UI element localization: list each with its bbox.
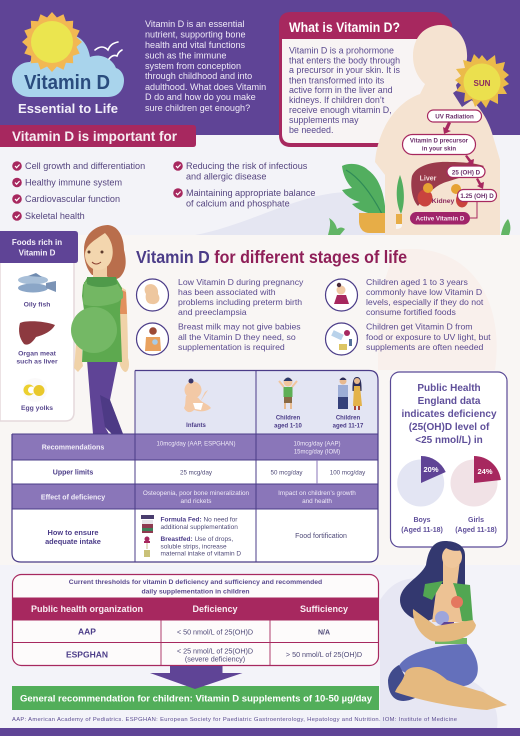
benefits list: Reducing the risk of infectious — [186, 161, 308, 171]
children 1-10 label — [274, 416, 302, 430]
egg yolks label: Egg yolks — [21, 405, 53, 412]
row: effect of deficiency: Impact on children’s growth — [278, 490, 356, 497]
icon: mother with baby — [136, 323, 168, 355]
children 1-10 label: aged 1-10 — [274, 424, 302, 430]
benefits list: Cell growth and differentiation — [25, 161, 145, 171]
benefits list: Cardiovascular function — [25, 194, 120, 204]
label: 1.25 (OH) D — [458, 190, 496, 202]
heading banner: Vitamin D is important for: Vitamin D is important for — [12, 128, 178, 144]
child silhouette — [375, 25, 500, 235]
baby — [435, 611, 449, 625]
girls label: (Aged 11-18) — [455, 527, 497, 534]
right arm — [116, 285, 129, 372]
pathway arrows — [443, 122, 484, 189]
icon: formula tin — [141, 515, 154, 533]
note: children 1 to 3 — [366, 277, 484, 317]
benefits list: Maintaining appropriate balance — [186, 188, 315, 198]
note: children 1 to 3: commonly have low Vitamin D — [366, 287, 482, 297]
row: effect of deficiency — [41, 490, 356, 505]
icon: birds — [95, 42, 122, 59]
foods heading: Vitamin D — [19, 248, 56, 258]
illustration: pregnant woman — [71, 225, 129, 434]
table: thresholds — [12, 574, 378, 666]
foods heading: Foods rich in — [12, 238, 62, 247]
row: how to ensure adequate intake — [45, 515, 347, 558]
benefits list — [12, 161, 315, 221]
neck — [93, 262, 107, 282]
intro text — [145, 19, 266, 113]
panel text: (25(OH)D level of — [409, 422, 490, 433]
plant: large leaf and pot — [328, 164, 510, 235]
table body — [12, 370, 378, 562]
panel: Public Health England data — [390, 372, 507, 547]
panel text: England data — [418, 396, 481, 407]
row: AAP: AAP — [78, 626, 96, 636]
row: effect of deficiency: Effect of deficiency — [41, 494, 105, 502]
body silhouette with vitamin D pathway — [375, 25, 509, 235]
callout: general recommendation — [12, 686, 379, 710]
row: upper limits: Upper limits — [53, 470, 93, 476]
row: recommendations: 10mcg/day (AAP) — [293, 442, 341, 448]
table caption: daily supplementation in children — [141, 588, 250, 596]
body silhouette with vitamin D pathway: Kidney — [432, 198, 455, 205]
header row — [12, 598, 378, 620]
logo word: Vitamin D — [24, 71, 110, 94]
note: breast milk — [178, 322, 301, 352]
note: breast milk: all the Vitamin D they need, so — [178, 332, 296, 342]
row: how to ensure adequate intake: maternal intake of vitamin D — [160, 550, 241, 558]
row: AAP — [78, 626, 330, 636]
benefits list: Healthy immune system — [25, 178, 122, 188]
note: UV and supplements — [366, 322, 491, 352]
panel: What is Vitamin D?: active form in the liver and — [289, 85, 393, 95]
logo tagline: Essential to Life — [18, 101, 118, 116]
label: 25 (OH) D — [447, 166, 485, 178]
row: upper limits — [53, 470, 366, 476]
row: effect of deficiency: and health — [302, 498, 332, 505]
boys label: Boys — [413, 517, 431, 524]
face and neck — [443, 560, 460, 585]
chart: boys 20% — [397, 456, 446, 506]
illustration: breastfeeding woman — [380, 541, 507, 728]
row: how to ensure adequate intake: Formula Fed: No need for — [160, 516, 238, 524]
intro text: nutrient, supporting bone — [145, 30, 246, 40]
organ meat label: Organ meat — [18, 350, 57, 358]
note: children 1 to 3: consume fortified foods — [366, 307, 456, 317]
panel: What is Vitamin D? — [279, 12, 460, 147]
icon: sun — [22, 12, 82, 72]
icon: dropper — [144, 536, 150, 557]
panel: What is Vitamin D?: What is Vitamin D? — [289, 20, 400, 35]
panel text — [401, 383, 497, 446]
table caption — [69, 579, 322, 596]
girls label — [455, 517, 497, 534]
organ meat label: such as liver — [16, 358, 58, 366]
body silhouette with vitamin D pathway: Liver — [420, 176, 437, 182]
plant in arm gap — [396, 175, 404, 229]
sun illustration: SUN — [474, 79, 491, 88]
intro text: D do and how do you make — [145, 92, 256, 102]
note: children 1 to 3: Children aged 1 to 3 years — [366, 277, 469, 287]
hair — [84, 225, 126, 279]
arms — [413, 609, 476, 642]
row: how to ensure adequate intake: Breastfed: Use of drops, — [160, 536, 233, 543]
stage notes with icons — [136, 277, 491, 355]
footer band — [0, 728, 520, 736]
row: ESPGHAN: > 50 nmol/L of 25(OH)D — [286, 650, 362, 659]
row: upper limits: 100 mcg/day — [330, 470, 366, 476]
heading banner: Vitamin D is important for — [0, 125, 196, 147]
intro text: system from conception — [145, 61, 241, 71]
face — [85, 233, 113, 270]
icon: organ meat — [19, 321, 55, 345]
row: upper limits: 50 mcg/day — [270, 470, 303, 476]
boys label: (Aged 11-18) — [401, 527, 443, 534]
chart: girls 24% — [450, 456, 501, 506]
note: children 1 to 3: levels, especially if they do not — [366, 297, 484, 307]
panel: What is Vitamin D?: then transformed into its — [289, 76, 385, 86]
note: pregnancy: problems including preterm birth — [178, 297, 302, 307]
hair — [400, 541, 465, 622]
note: pregnancy — [178, 277, 304, 317]
row: how to ensure adequate intake: adequate intake — [45, 537, 101, 546]
row: recommendations — [42, 442, 341, 456]
green top — [423, 581, 473, 622]
legs — [395, 667, 507, 710]
children 11-17 label: Children — [336, 416, 360, 422]
chart: boys 20%: 20% — [423, 465, 439, 474]
row: recommendations: 10mcg/day (AAP, ESPGHAN) — [157, 442, 235, 448]
label: 25 (OH) D: 25 (OH) D — [452, 169, 481, 176]
panel: What is Vitamin D?: that enters the body through — [289, 56, 400, 66]
row: how to ensure adequate intake: additional supplementation — [160, 524, 238, 531]
icon: toddler — [326, 279, 358, 311]
foods heading — [0, 231, 78, 263]
footnote: AAP: American Academy of Pediatrics. ESPGHAN: European Society for Paediatric Gastroenterology, Hepatology and Nutrition. IOM: Institute of Medicine — [12, 717, 457, 723]
panel text: Public Health — [417, 383, 481, 394]
header row: Deficiency — [192, 604, 238, 614]
oily fish label: Oily fish — [24, 302, 50, 308]
row: ESPGHAN: (severe deficiency) — [185, 654, 245, 664]
label: Active Vitamin D: Active Vitamin D — [416, 216, 465, 223]
age column headers — [135, 370, 378, 435]
panel text: <25 nmol/L) in — [415, 435, 483, 446]
girls label: Girls — [468, 517, 484, 524]
chest — [432, 584, 468, 622]
panel: What is Vitamin D?: Vitamin D is a prohormone — [289, 46, 394, 56]
panel: What is Vitamin D?: supplements may — [289, 115, 359, 125]
row: ESPGHAN — [66, 646, 362, 664]
benefits list: Skeletal health — [25, 211, 85, 221]
arrow: down to general recommendation — [150, 666, 242, 689]
panel text: indicates deficiency — [401, 409, 497, 420]
logo: Vitamin D Essential to Life — [12, 12, 124, 116]
callout: general recommendation: General recommendation for children: Vitamin D supplements of 10-50 µg/day — [20, 694, 372, 704]
boys label — [401, 517, 443, 534]
row: recommendations: 15mcg/day (IOM) — [294, 450, 340, 456]
label: UV Radiation: UV Radiation — [435, 114, 474, 120]
table caption: Current thresholds for vitamin D deficiency and sufficiency and recommended — [69, 579, 322, 586]
icon: adolescents — [338, 377, 362, 410]
header row: Sufficiency — [300, 604, 348, 614]
children 11-17 label — [333, 416, 364, 430]
label: Vitamin D precursor — [402, 134, 476, 154]
intro text: health and vital functions — [145, 40, 246, 50]
table: recommendations by age — [12, 370, 378, 562]
green dress — [82, 278, 122, 362]
icon: fetus — [136, 279, 168, 311]
icon: cloud — [12, 35, 124, 97]
icon: child 1-10 — [279, 378, 297, 409]
legs — [87, 360, 123, 434]
children 11-17 label: aged 11-17 — [333, 424, 364, 430]
icon: oily fish — [18, 273, 56, 292]
infants label: Infants — [186, 423, 206, 429]
intro text: sure children get enough? — [145, 103, 250, 113]
row: upper limits: 25 mcg/day — [180, 470, 213, 476]
children 1-10 label: Children — [276, 416, 300, 422]
organ meat label — [16, 350, 58, 366]
label: Vitamin D precursor: in your skin — [422, 146, 456, 152]
row: how to ensure adequate intake: soluble strips, increase — [160, 543, 227, 550]
panel: What is Vitamin D?: receive enough vitamin D, — [289, 105, 392, 115]
row: ESPGHAN: < 25 nmol/L of 25(OH)D — [177, 646, 253, 656]
row: effect of deficiency: and rickets — [181, 498, 211, 505]
row: how to ensure adequate intake: How to ensure — [48, 528, 98, 537]
label: Vitamin D precursor: Vitamin D precursor — [410, 138, 469, 144]
note: breast milk: supplementation is required — [178, 342, 285, 352]
row: recommendations: Recommendations — [42, 444, 104, 452]
panel: foods rich in Vitamin D — [0, 231, 78, 421]
intro text: through childhood and into — [145, 71, 252, 81]
row: how to ensure adequate intake: Food fortification — [295, 533, 347, 540]
label: Active Vitamin D — [410, 212, 470, 224]
panel: What is Vitamin D?: a precursor in your skin. It is — [289, 65, 401, 75]
intro text: Vitamin D is an essential — [145, 19, 244, 29]
intro text: adulthood. What does Vitamin — [145, 82, 266, 92]
chart: girls 24%: 24% — [477, 467, 493, 476]
note: pregnancy: Low Vitamin D during pregnancy — [178, 277, 304, 287]
panel: What is Vitamin D?: be needed. — [289, 125, 333, 135]
icon: supplements — [326, 323, 358, 355]
benefits list: of calcium and phosphate — [186, 198, 290, 208]
sun illustration — [453, 54, 509, 108]
liver and kidneys — [411, 162, 484, 206]
panel: What is Vitamin D?: kidneys. If children don’t — [289, 95, 385, 105]
intro text: such as the immune — [145, 50, 226, 60]
note: UV and supplements: supplements are often needed — [366, 342, 484, 352]
header row: Public health organization — [31, 604, 143, 614]
benefits list: and allergic disease — [186, 172, 266, 182]
row: AAP: < 50 nmol/L of 25(OH)D — [177, 628, 253, 636]
waist and skirt — [398, 644, 478, 686]
row: AAP: N/A — [318, 630, 330, 636]
label: 1.25 (OH) D: 1.25 (OH) D — [460, 193, 494, 200]
note: pregnancy: has been associated with — [178, 287, 276, 297]
label: UV Radiation — [428, 110, 482, 122]
note: pregnancy: and preeclampsia — [178, 307, 247, 317]
left hand — [74, 340, 83, 372]
icon: infant — [184, 378, 211, 412]
row: effect of deficiency: Osteopenia, poor bone mineralization — [143, 490, 250, 497]
row: ESPGHAN: ESPGHAN — [66, 650, 108, 660]
note: UV and supplements: Children get Vitamin D from — [366, 322, 473, 332]
note: UV and supplements: food or exposure to UV light, but — [366, 332, 491, 342]
heading: Vitamin D for different stages of life: Vitamin D for different stages of life — [136, 247, 407, 267]
note: breast milk: Breast milk may not give babies — [178, 322, 301, 332]
icon: egg yolks — [23, 378, 47, 402]
